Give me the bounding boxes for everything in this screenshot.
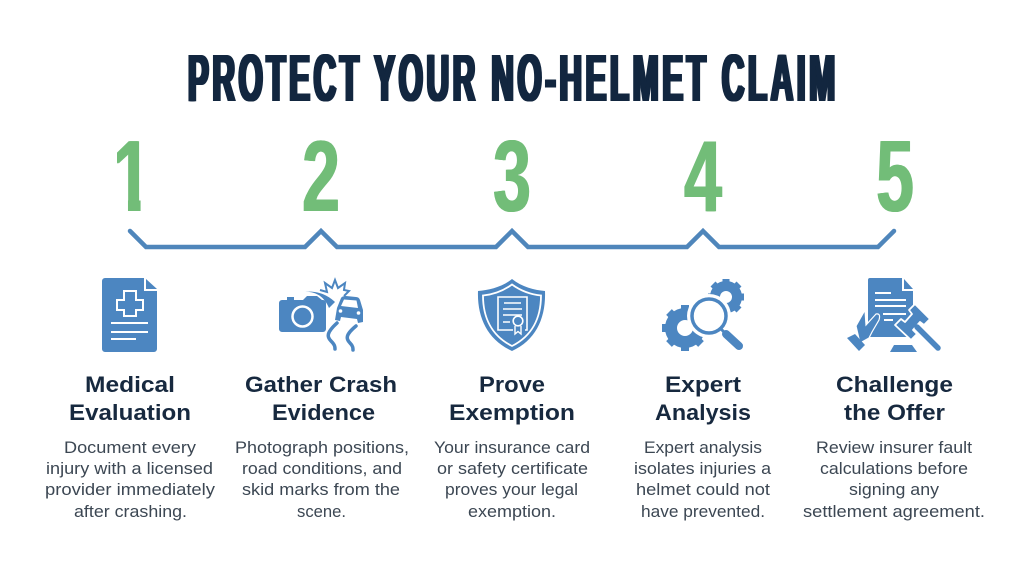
step 4 text: isolates injuries a [634,460,772,478]
step 2 text: Photograph positions, [235,439,409,457]
step 4 text: have prevented. [641,503,765,521]
step 2 text: Evidence [272,400,375,425]
step 5 text: the Offer [844,400,945,425]
step 3 text: proves your legal [445,481,578,499]
step 4 text: Expert [665,372,742,397]
step 3 text [434,372,590,521]
step 2 text: Gather Crash [245,372,397,397]
step 1 text: Medical [85,372,175,397]
step 1 text: injury with a licensed [46,460,213,478]
step numbers [117,121,914,233]
step 4 text: helmet could not [636,481,770,499]
step numbers: 1 [113,121,151,233]
step 3 text: Prove [479,372,545,397]
step 5 text: calculations before [820,460,968,478]
step 3 text: Your insurance card [434,439,590,457]
icon: document, hand and gavel [847,278,938,352]
step 2 text [235,372,409,521]
step 5 text: settlement agreement. [803,503,985,521]
step 5 text: Review insurer fault [816,439,972,457]
icon: medical document [102,278,157,352]
step 5 text: signing any [849,481,940,499]
icon: camera and crashed car [279,280,363,350]
step 5 text [803,372,985,521]
timeline connector [130,231,894,247]
step 4 text: Expert analysis [644,439,762,457]
step 2 text: skid marks from the [242,481,400,499]
step numbers: 4 [684,121,722,233]
icon: shield with certificate [478,279,545,351]
step numbers: 3 [493,121,531,233]
step 1 text: after crashing. [74,503,187,521]
step numbers: 2 [302,121,340,233]
step 4 text [634,372,772,521]
step 1 text: Document every [64,439,197,457]
step 2 text: road conditions, and [242,460,402,478]
title: PROTECT YOUR NO-HELMET CLAIM [188,41,839,116]
step 5 text: Challenge [836,372,953,397]
step 3 text: exemption. [468,503,556,521]
step 1 text: Evaluation [69,400,191,425]
step 1 text: provider immediately [45,481,216,499]
step numbers: 5 [876,121,914,233]
icon: gears and magnifier [662,279,744,351]
step 4 text: Analysis [655,400,751,425]
step 1 text [45,372,216,521]
step 3 text: or safety certificate [437,460,588,478]
step 3 text: Exemption [449,400,575,425]
step 2 text: scene. [297,503,346,521]
